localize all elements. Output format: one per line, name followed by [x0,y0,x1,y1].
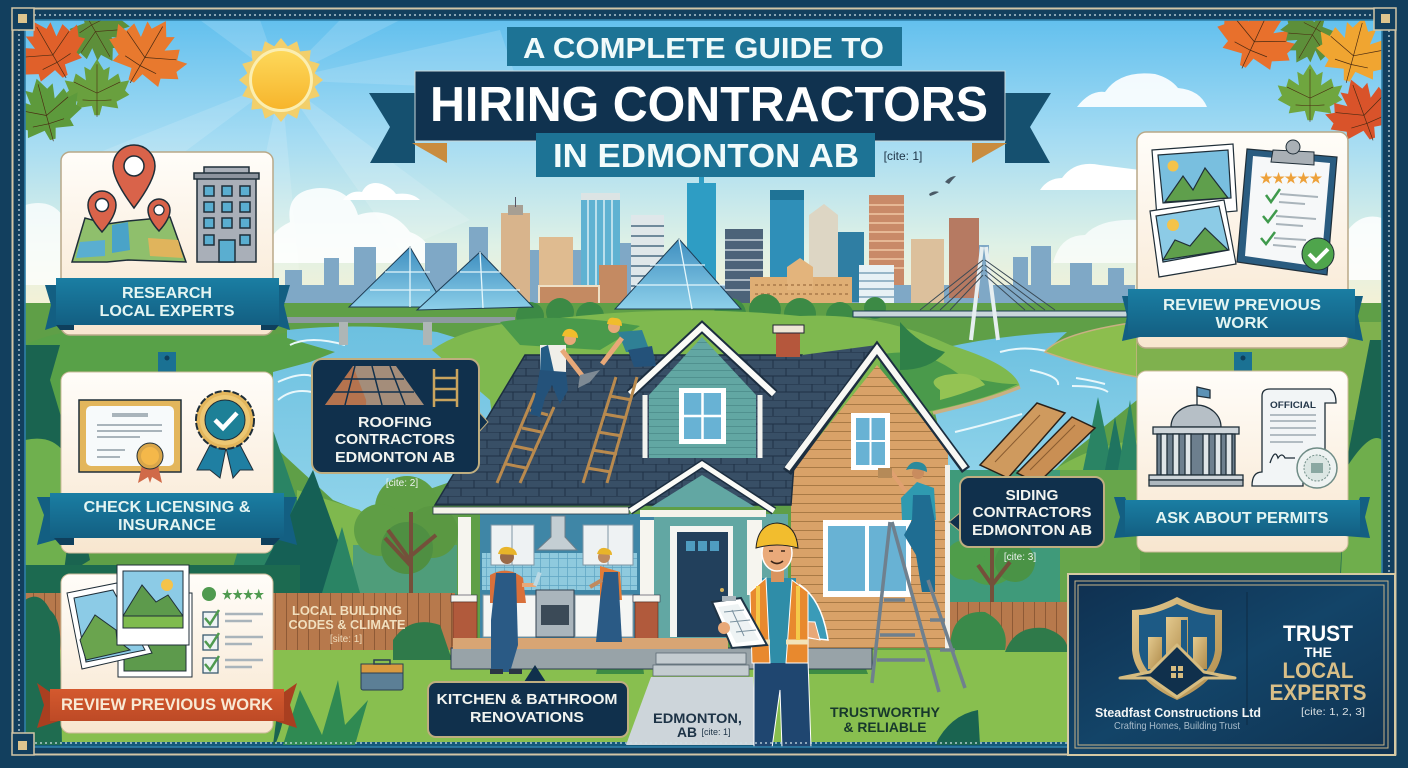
right ribbon fold [972,143,1007,163]
sun rays [80,20,520,280]
connector clip left [155,352,181,384]
roofing text [335,414,455,466]
slogan: TRUST [1283,621,1354,646]
trustworthy label [830,704,941,735]
foundation [451,648,872,669]
right lower hill [1040,440,1140,600]
lawn [25,650,1070,747]
ribbon text: WORK [1216,315,1269,332]
house [433,325,966,676]
dormer wall [649,337,756,458]
trustworthy label: & RELIABLE [844,719,926,735]
ribbon text: ASK ABOUT PERMITS [1156,510,1329,527]
icon: map and pins [72,145,186,262]
siding text: EDMONTON AB [972,522,1092,539]
neck [771,568,784,582]
icon: badge [196,391,254,478]
face [762,535,792,571]
fence [25,593,1070,652]
side wing wall [791,365,948,648]
roof eave [433,507,629,514]
ribbon text: LOCAL EXPERTS [100,303,235,320]
left hill slope [297,490,380,595]
slogan: THE [1304,644,1332,660]
upper cabinets [491,525,633,565]
landscape ground [25,303,1382,748]
top heading: A COMPLETE GUIDE TO [523,33,884,65]
ribbon text: REVIEW PREVIOUS WORK [61,696,273,714]
right forest [945,340,1382,602]
eyes and smile [769,551,785,564]
main roof [435,355,802,505]
chimney [773,325,804,357]
right roof section [758,345,877,470]
front steps [653,653,749,676]
clouds [25,73,1382,285]
connector clip right [1230,352,1256,385]
forearm [770,620,820,640]
ribbon [45,278,290,330]
siding citation: [cite: 3] [1004,552,1036,563]
icon: official document: OFFICIAL [1270,400,1316,411]
shield logo [1120,597,1235,700]
roof ladders [497,377,637,483]
roofing text: EDMONTON AB [335,449,455,466]
ribbon [1122,289,1363,341]
icon: official document [1252,389,1337,488]
icon: photos [67,565,192,677]
ribbon [37,493,297,545]
right ribbon tail [1005,93,1051,163]
kitchen text: KITCHEN & BATHROOM [436,691,618,708]
left forest [25,345,458,600]
icon: clipboard [1237,140,1337,275]
siding text: SIDING [1006,487,1058,504]
shirt [762,578,796,663]
main heading: HIRING CONTRACTORS [430,78,988,132]
panel: review previous work right [1122,132,1363,348]
tree line [516,294,886,330]
kitchen worker right [590,548,622,642]
roofing text: ROOFING [358,414,432,431]
clipboard [712,596,767,648]
bridges [285,247,1127,345]
ribbon text: RESEARCH [122,285,212,302]
a-frame ladder [872,522,965,692]
dormer window [679,388,726,444]
slogan citation: [cite: 1, 2, 3] [1301,707,1365,718]
icon: rating checklist [202,587,264,673]
ribbon text: INSURANCE [118,517,216,534]
title banner [369,27,1051,177]
river highlights [278,340,1108,432]
entry wall [654,514,788,638]
ladder icon [434,369,457,407]
downtown towers [501,176,979,309]
round tree behind callout [945,525,1035,602]
kitchen worker left [490,547,542,674]
panel: research local experts [45,145,290,335]
birds [929,176,956,196]
right gable trim [787,349,966,472]
distant skyline [285,227,1135,310]
decorative maple leaves left [2,0,200,151]
lead contractor [712,523,828,748]
porch beam [640,510,766,517]
safety vest [750,578,808,663]
large side window [823,520,911,597]
gable window [851,413,890,470]
stove [536,590,574,637]
round tree [354,476,458,593]
corner trim [945,465,950,650]
sun [226,25,336,135]
lower cabinets [483,595,633,637]
kitchen text: RENOVATIONS [470,709,584,726]
local codes label: [site: 1] [330,634,362,645]
right river [935,332,1137,475]
title citation: [cite: 1] [884,149,922,163]
kitchen text [436,691,618,726]
porch deck [453,638,728,649]
slogan [1270,621,1366,705]
bottom ground strip [25,742,1070,747]
roofing citation: [cite: 2] [386,478,418,489]
porch gable [651,475,755,507]
local codes label: CODES & CLIMATE [288,617,406,632]
backsplash [482,553,637,590]
door frame [670,526,733,637]
left ribbon fold [412,143,447,163]
porch wall [480,514,788,638]
roofing text: CONTRACTORS [335,431,455,448]
panel: steadfast constructions brand [1068,574,1395,755]
ribbon [37,683,297,728]
ribbon text: REVIEW PREVIOUS [1163,297,1321,314]
slogan: EXPERTS [1270,680,1366,705]
local codes label: LOCAL BUILDING [292,603,402,618]
ribbon text [100,285,235,320]
siding text: CONTRACTORS [972,504,1092,521]
left ribbon tail [369,93,415,163]
door [677,532,728,637]
icon: certificate [79,400,181,483]
hedges and plants [25,597,1068,745]
trustworthy label: TRUSTWORTHY [830,704,941,720]
valley teal [950,470,1060,602]
roofer two [602,318,656,367]
local codes label [288,603,406,645]
ribbon text: CHECK LICENSING & [84,499,251,516]
left river [273,326,497,512]
trousers [754,660,811,748]
walkway [626,677,756,745]
dormer gable trim [630,327,774,394]
roofer one [530,329,600,417]
range hood [537,516,577,550]
hand [718,622,730,634]
tagline: Crafting Homes, Building Trust [1114,720,1240,732]
icon: government building [1149,387,1243,486]
shingle icon [325,366,424,405]
ribbon [1114,497,1370,538]
driveway label: AB [677,724,697,740]
siding worker [878,462,936,592]
icon: clipboard: ★★★★★ [1260,170,1322,186]
shirt arm right [800,585,828,640]
callout: kitchen and bathroom [428,665,628,737]
icon: rating checklist: ★★★★ [222,587,264,602]
valley floor [353,545,457,595]
right meadow [1040,470,1140,600]
wood planks icon [980,403,1095,483]
company name: Steadfast Constructions Ltd [1095,705,1261,720]
porch columns [451,517,762,646]
porch gable trim [630,464,774,511]
slogan: LOCAL [1282,658,1354,683]
porch gable fascia [630,464,774,511]
icon: photos [1150,144,1237,277]
glass pyramids [349,239,741,310]
ribbon text [1163,297,1321,332]
icon: office building [194,167,259,262]
dormer posts [645,395,760,458]
driveway label: [cite: 1] [701,727,731,737]
panel: review previous work left [37,565,297,733]
toolbox [361,660,403,690]
gold inner border [1075,581,1388,748]
siding text [972,487,1092,539]
left hills [25,329,335,430]
sub heading: IN EDMONTON AB [553,137,859,174]
driveway label: EDMONTON, [653,710,742,726]
sky background [25,20,1382,310]
panel: ask about permits [1114,371,1370,552]
top heading [507,27,902,66]
callout: siding [949,477,1104,547]
right gable white fascia [787,349,965,469]
dormer gable fascia [630,327,774,394]
ribbon text [84,499,251,534]
green hills behind house [432,310,1382,480]
driveway label [653,710,742,740]
decorative maple leaves right [1206,0,1407,153]
panel: check licensing and insurance [37,372,297,553]
callout: roofing [312,359,488,473]
hard hat [756,523,798,548]
